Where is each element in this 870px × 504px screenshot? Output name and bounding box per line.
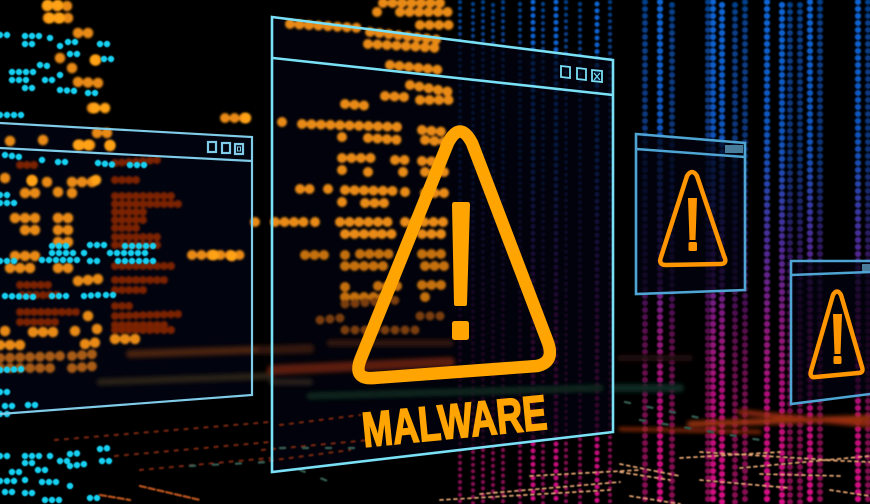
icon: warning triangle xyxy=(660,172,725,265)
left window panel fill xyxy=(0,123,252,414)
cyan code xyxy=(0,35,160,500)
small alert window, lower right xyxy=(791,261,870,404)
left window title bar line xyxy=(0,148,252,161)
floor light specks xyxy=(55,402,870,504)
left window xyxy=(0,123,252,414)
small window title bar line xyxy=(636,149,745,157)
icon: warning triangle xyxy=(811,292,862,377)
orange highlights xyxy=(32,5,246,256)
blurred floor streaks xyxy=(100,343,870,432)
icon: exclamation dot xyxy=(452,321,469,340)
icon: large warning triangle xyxy=(358,132,550,378)
data columns: binary code rain xyxy=(460,2,868,504)
main window title bar line xyxy=(273,58,613,95)
small window panel xyxy=(791,261,870,404)
icon: exclamation mark xyxy=(688,198,697,251)
icon: exclamation bar xyxy=(452,202,470,306)
main alert window xyxy=(272,17,613,472)
small window controls xyxy=(725,145,743,153)
left window controls xyxy=(208,142,243,154)
icon: exclamation mark xyxy=(833,314,842,364)
out-of-focus orange code xyxy=(0,3,450,368)
blurred red code in left window xyxy=(20,160,184,330)
small window title bar line xyxy=(791,272,870,275)
small window controls xyxy=(862,264,870,271)
label: MALWARE: MALWARE xyxy=(360,386,549,458)
main window panel fill xyxy=(271,16,613,473)
left window frame xyxy=(0,123,252,414)
main window controls xyxy=(561,66,602,82)
small alert window, upper right xyxy=(636,134,745,294)
small window panel xyxy=(636,134,745,294)
small window frame xyxy=(791,261,870,404)
main window frame xyxy=(272,17,613,472)
